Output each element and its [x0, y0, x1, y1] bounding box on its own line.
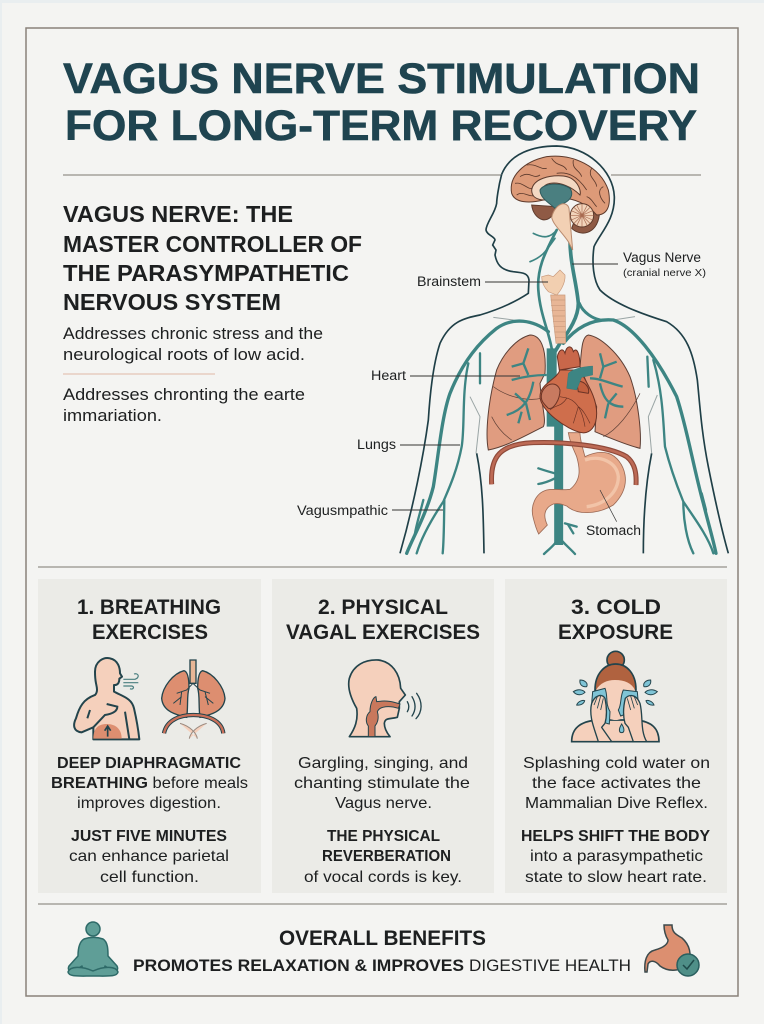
icon: breathing person and lungs — [74, 658, 225, 739]
lungs — [487, 335, 640, 450]
heading: physical vagal — [286, 596, 480, 644]
text: splashing and parasympathetic shift: the face activates the — [532, 775, 701, 792]
icon: stomach with check — [645, 925, 699, 976]
title: FOR LONG-TERM RECOVERY — [65, 102, 697, 150]
text: splashing and parasympathetic shift: into a parasympathetic — [530, 848, 703, 865]
footer: overall benefits: PROMOTES RELAXATION & IMPROVES — [133, 956, 464, 975]
subheading: master controller: NERVOUS SYSTEM — [63, 289, 281, 315]
text: splashing and parasympathetic shift: Mammalian Dive Reflex. — [525, 795, 708, 812]
label: vagus nerve — [572, 250, 706, 279]
text: splashing and parasympathetic shift: HELPS SHIFT THE BODY — [521, 828, 710, 845]
heading: physical vagal: VAGAL EXERCISES — [286, 621, 480, 644]
text: deep diaphragmatic breathing: improves digestion. — [77, 795, 221, 812]
text: deep diaphragmatic breathing: JUST FIVE MINUTES — [71, 828, 227, 845]
label: lungs: Lungs — [357, 437, 396, 452]
trachea — [542, 270, 566, 343]
title: VAGUS NERVE STIMULATION — [63, 55, 700, 103]
text: gargling and reverberation — [294, 755, 470, 886]
text: deep diaphragmatic breathing: cell function. — [100, 869, 199, 886]
text: gargling and reverberation: THE PHYSICAL — [327, 828, 440, 845]
label: brainstem — [417, 274, 548, 289]
text: deep diaphragmatic breathing: DEEP DIAPHRAGMATIC — [57, 755, 241, 772]
text: gargling and reverberation: chanting stimulate the — [294, 775, 470, 792]
panel: physical vagal exercises — [272, 579, 494, 893]
bronchial tree — [507, 348, 623, 423]
label: heart: Heart — [371, 368, 406, 383]
heading: breathing: 1. BREATHING — [77, 596, 221, 619]
icon: head with vocal tract — [349, 660, 421, 737]
subheading: master controller — [63, 201, 362, 315]
footer: overall benefits — [133, 927, 631, 975]
body outline — [400, 146, 728, 553]
text: splashing and parasympathetic shift: Splashing cold water on — [523, 755, 710, 772]
intro text block: immariation. — [63, 406, 162, 425]
footer: overall benefits: DIGESTIVE HEALTH — [469, 956, 631, 975]
anatomy diagram — [400, 146, 728, 554]
text: gargling and reverberation: Gargling, singing, and — [298, 755, 468, 772]
intro text block — [63, 324, 323, 425]
text: deep diaphragmatic breathing — [51, 755, 248, 886]
label: lungs — [357, 437, 460, 452]
panel: breathing exercises — [38, 579, 261, 893]
heading: physical vagal: 2. PHYSICAL — [318, 596, 448, 619]
brain — [511, 156, 609, 250]
stomach — [532, 433, 625, 534]
text: gargling and reverberation: Vagus nerve. — [335, 795, 432, 812]
panel: cold exposure — [505, 579, 727, 893]
text: gargling and reverberation: of vocal cords is key. — [304, 869, 462, 886]
subheading: master controller: MASTER CONTROLLER OF — [63, 231, 362, 257]
label: vagusmpathic: Vagusmpathic — [297, 503, 388, 518]
text: deep diaphragmatic breathing: BREATHING before meals — [51, 775, 248, 792]
text: gargling and reverberation: REVERBERATION — [322, 848, 451, 865]
icon: face splashed with cold water — [572, 651, 659, 742]
heading: cold exposure: EXPOSURE — [558, 621, 673, 644]
heading: breathing — [77, 596, 221, 644]
heart — [540, 347, 597, 433]
label: vagus nerve: (cranial nerve X) — [623, 267, 706, 279]
heading: cold exposure — [558, 596, 673, 644]
label: brainstem: Brainstem — [417, 274, 481, 289]
label: stomach: Stomach — [586, 523, 641, 538]
text: splashing and parasympathetic shift — [521, 755, 710, 886]
subheading: master controller: THE PARASYMPATHETIC — [63, 260, 349, 286]
nerves — [407, 230, 716, 554]
diaphragm — [491, 442, 636, 485]
label: vagus nerve: Vagus Nerve — [623, 250, 701, 265]
footer: overall benefits: OVERALL BENEFITS — [279, 927, 486, 950]
title — [63, 55, 700, 150]
heading: cold exposure: 3. COLD — [571, 596, 661, 619]
icon: meditating figure — [68, 922, 118, 976]
heading: breathing: EXERCISES — [92, 621, 208, 644]
text: deep diaphragmatic breathing: can enhance parietal — [69, 848, 229, 865]
intro text block: Addresses chronic stress and the — [63, 324, 323, 343]
intro text block: Addresses chronting the earte — [63, 385, 305, 404]
intro text block: neurological roots of low acid. — [63, 345, 305, 364]
subheading: master controller: VAGUS NERVE: THE — [63, 201, 293, 227]
text: splashing and parasympathetic shift: state to slow heart rate. — [525, 869, 707, 886]
